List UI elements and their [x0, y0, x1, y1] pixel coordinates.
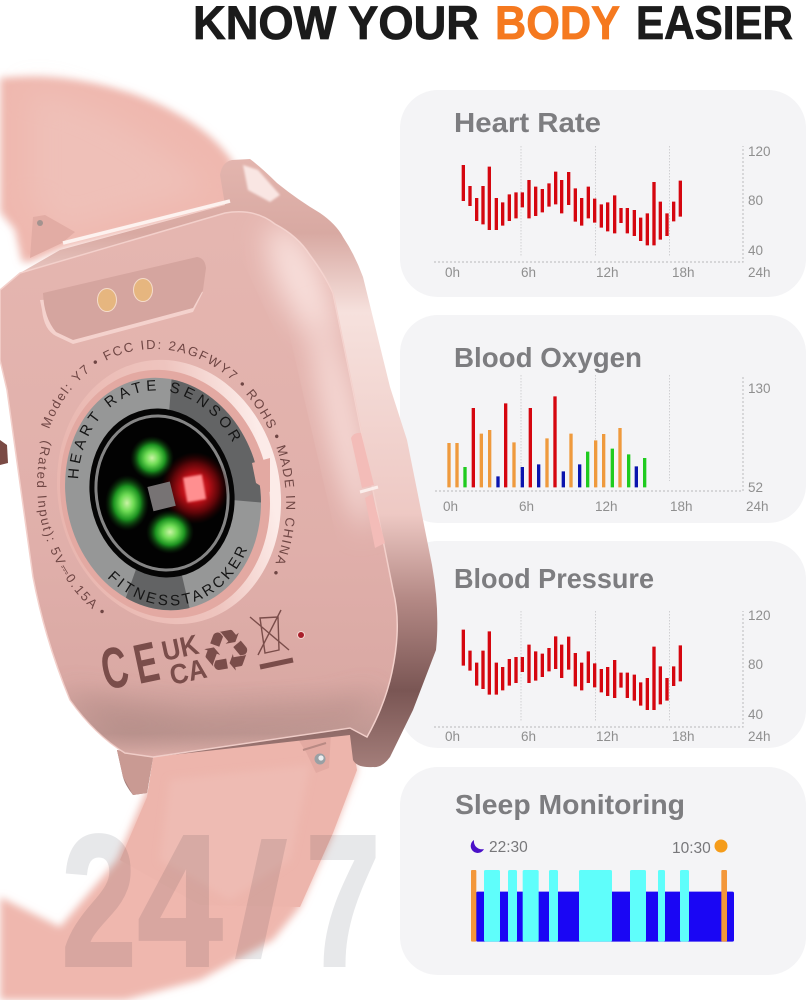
axis labels: blood oxygen: 0h [443, 499, 458, 514]
icon: moon [471, 840, 484, 853]
watermark 24/7: 2 [62, 798, 136, 1000]
heading: blood pressure: Blood Pressure [454, 563, 654, 594]
axis labels: heart rate [445, 144, 771, 280]
axis labels: blood oxygen: 12h [595, 499, 618, 514]
back plate highlights [60, 216, 382, 745]
watermark 24/7: 4 [138, 798, 222, 1000]
charging pins [98, 288, 116, 312]
axis labels: blood pressure: 0h [445, 729, 460, 744]
title [193, 0, 793, 49]
panel: sleep monitoring [400, 767, 806, 975]
sensor text: FITNESSTARCKER [108, 546, 248, 606]
lower lug shading [117, 750, 153, 795]
compliance marks: E [129, 630, 164, 696]
axis labels: blood pressure: 12h [596, 729, 619, 744]
panel: heart rate [400, 90, 806, 297]
strap lug [30, 215, 75, 258]
axis labels: blood oxygen: 18h [670, 499, 693, 514]
sensor text [36, 340, 296, 614]
chart: sleep stages [471, 870, 734, 942]
axis labels: heart rate: 120 [748, 144, 771, 159]
watch body [0, 159, 438, 795]
axis labels: heart rate: 12h [596, 265, 619, 280]
icon: recycle: ♻ [195, 614, 258, 690]
axis labels: blood pressure: 40 [748, 707, 763, 722]
axis labels: heart rate: 24h [748, 265, 771, 280]
watch pin [298, 733, 331, 773]
axis labels: blood pressure: 18h [672, 729, 695, 744]
axis labels: heart rate: 80 [748, 193, 763, 208]
icon: crossed-out bin [250, 610, 293, 667]
axis labels: blood oxygen [443, 381, 771, 514]
axis labels: blood pressure: 24h [748, 729, 771, 744]
watermark 24/7: / [236, 814, 286, 988]
compliance marks: UK [159, 629, 201, 667]
axis labels: blood oxygen: 6h [519, 499, 534, 514]
watermark 24/7 [62, 798, 380, 1000]
back plate [0, 212, 397, 757]
disc notch [252, 458, 270, 492]
sensor lights [105, 436, 229, 554]
axis labels: blood pressure: 80 [748, 657, 763, 672]
white strap gap line [63, 201, 230, 243]
compliance marks: CA [167, 653, 209, 691]
lower watch strap [0, 728, 357, 1000]
axis labels: blood oxygen: 130 [748, 381, 771, 396]
watermark 24/7: 7 [306, 798, 380, 1000]
charging recess [40, 257, 206, 344]
axis labels: blood pressure [445, 608, 771, 744]
case side band [0, 159, 437, 795]
sleep start time: 22:30 [489, 839, 528, 856]
heading: heart rate: Heart Rate [454, 107, 601, 138]
compliance marks [95, 610, 305, 703]
red indicator dot [297, 631, 305, 639]
axis labels: blood pressure: 120 [748, 608, 771, 623]
axis labels: heart rate: 40 [748, 243, 763, 258]
panel: blood pressure [400, 541, 806, 748]
chart: blood pressure bars [463, 630, 680, 710]
heading: blood oxygen: Blood Oxygen [454, 342, 642, 373]
sensor disc [65, 378, 270, 610]
side buttons [351, 433, 385, 548]
axis labels: blood oxygen: 24h [746, 499, 769, 514]
icon: sun [714, 840, 728, 852]
axis labels: blood pressure: 6h [521, 729, 536, 744]
wake time: 10:30 [672, 840, 711, 857]
heading: sleep monitoring: Sleep Monitoring [455, 789, 685, 820]
chart: heart rate bars [463, 165, 680, 245]
axis labels: blood oxygen: 52 [748, 480, 763, 495]
chart: blood oxygen bars [449, 396, 645, 487]
sensor text: HEART RATE SENSOR [68, 380, 240, 478]
upper watch strap [0, 77, 234, 262]
compliance marks: C [95, 634, 134, 703]
panel: blood oxygen [400, 315, 806, 523]
axis labels: heart rate: 6h [521, 265, 536, 280]
engraved text: Model: Y7 • FCC ID: 2AGFWY7 • ROHS • MADE IN CHINA • [41, 340, 296, 574]
axis labels: heart rate: 0h [445, 265, 460, 280]
axis labels: heart rate: 18h [672, 265, 695, 280]
dark notch at left edge [0, 440, 8, 465]
sensor ring [33, 339, 305, 645]
sensor text: (Rated Input): 5V⎓0.15A • [36, 441, 104, 614]
